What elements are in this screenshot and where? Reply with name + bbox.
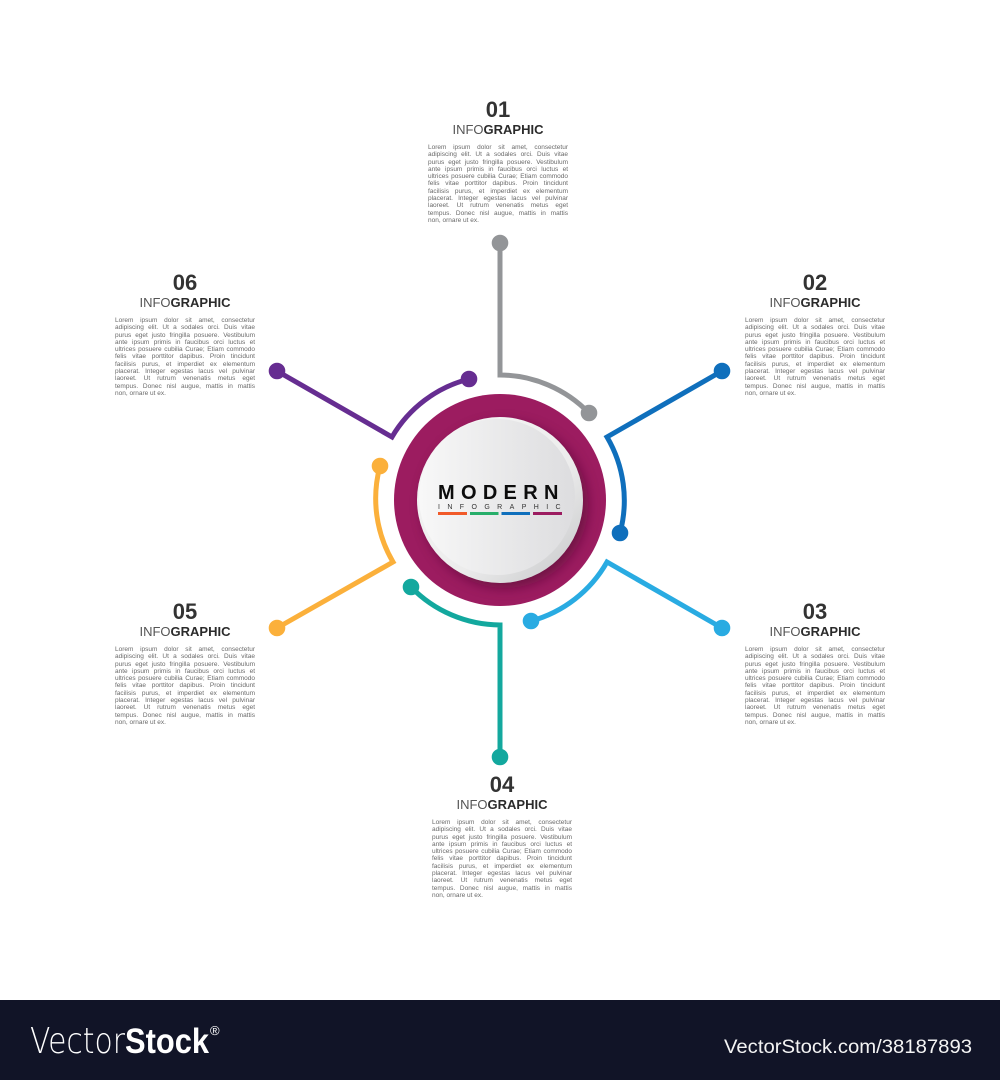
panel 06	[115, 270, 255, 397]
footer logo: ®	[210, 1023, 220, 1038]
body text 03: purus eget justo fringilla posuere. Vestibulum	[745, 661, 885, 668]
body text 03: laoreet. Ut rutrum venenatis metus eget	[745, 704, 885, 711]
body text 03: placerat. Integer egestas lacus vel pulvinar	[745, 697, 885, 704]
footer bar	[0, 1000, 1000, 1080]
number 04: 04	[490, 772, 514, 797]
body text 01: purus eget justo fringilla posuere. Vestibulum	[428, 159, 568, 166]
body text 02	[745, 317, 885, 397]
body text 04: Lorem ipsum dolor sit amet, consectetur	[432, 819, 572, 826]
number 02: 02	[803, 270, 827, 295]
connector 02: blue	[607, 365, 728, 539]
heading 01: INFOGRAPHIC	[452, 122, 544, 137]
connector 01: gray	[494, 237, 595, 419]
body text 01: ultrices posuere cubilia Curae; Etiam commodo	[428, 173, 568, 180]
body text 05: placerat. Integer egestas lacus vel pulvinar	[115, 697, 255, 704]
body text 04: placerat. Integer egestas lacus vel pulvinar	[432, 870, 572, 877]
connector 06: purple	[271, 365, 475, 437]
heading 02: INFOGRAPHIC	[769, 295, 860, 310]
connector 03: light blue	[525, 562, 728, 634]
body text 06: adipiscing elit. Ut a sodales orci. Duis vitae	[115, 324, 255, 331]
number 06: 06	[173, 270, 197, 295]
body text 04: facilisis purus, et imperdiet ex elementum	[432, 863, 572, 870]
central badge	[394, 394, 606, 606]
number 01: 01	[486, 97, 510, 122]
body text 02: laoreet. Ut rutrum venenatis metus eget	[745, 375, 885, 382]
panel 03	[745, 599, 885, 726]
connector 05: orange	[271, 460, 393, 634]
body text 01: adipiscing elit. Ut a sodales orci. Duis vitae	[428, 151, 568, 158]
body text 06: tempus. Donec nisl augue, mattis in mattis	[115, 383, 255, 390]
footer logo: Stock	[125, 1022, 209, 1061]
body text 02: ultrices posuere cubilia Curae; Etiam commodo	[745, 346, 885, 353]
body text 05: purus eget justo fringilla posuere. Vestibulum	[115, 661, 255, 668]
body text 05	[115, 646, 255, 726]
panel 04	[432, 772, 572, 899]
body text 05: non, ornare ut ex.	[115, 719, 166, 726]
heading 06: INFOGRAPHIC	[139, 295, 230, 310]
body text 01: tempus. Donec nisl augue, mattis in mattis	[428, 210, 568, 217]
body text 05: ante ipsum primis in faucibus orci luctus et	[115, 668, 255, 675]
body text 05: ultrices posuere cubilia Curae; Etiam commodo	[115, 675, 255, 682]
body text 01	[428, 144, 568, 224]
body text 06: felis vitae porttitor dapibus. Proin tincidunt	[115, 353, 255, 360]
body text 01: Lorem ipsum dolor sit amet, consectetur	[428, 144, 568, 151]
body text 05: facilisis purus, et imperdiet ex elementum	[115, 690, 255, 697]
body text 04: laoreet. Ut rutrum venenatis metus eget	[432, 877, 572, 884]
body text 01: placerat. Integer egestas lacus vel pulvinar	[428, 195, 568, 202]
number 03: 03	[803, 599, 827, 624]
body text 04: purus eget justo fringilla posuere. Vestibulum	[432, 834, 572, 841]
body text 04: tempus. Donec nisl augue, mattis in mattis	[432, 885, 572, 892]
footer logo	[30, 1021, 220, 1062]
body text 02: ante ipsum primis in faucibus orci luctus et	[745, 339, 885, 346]
panel 01	[428, 97, 568, 224]
body text 01: facilisis purus, et imperdiet ex elementum	[428, 188, 568, 195]
body text 05: laoreet. Ut rutrum venenatis metus eget	[115, 704, 255, 711]
body text 06	[115, 317, 255, 397]
body text 03: ante ipsum primis in faucibus orci luctus et	[745, 668, 885, 675]
body text 05: tempus. Donec nisl augue, mattis in mattis	[115, 712, 255, 719]
body text 06: ante ipsum primis in faucibus orci luctus et	[115, 339, 255, 346]
body text 06: non, ornare ut ex.	[115, 390, 166, 397]
panel 05	[115, 599, 255, 726]
body text 03: ultrices posuere cubilia Curae; Etiam commodo	[745, 675, 885, 682]
body text 02: adipiscing elit. Ut a sodales orci. Duis vitae	[745, 324, 885, 331]
body text 03: felis vitae porttitor dapibus. Proin tincidunt	[745, 682, 885, 689]
heading 03: INFOGRAPHIC	[769, 624, 860, 639]
body text 04: ultrices posuere cubilia Curae; Etiam commodo	[432, 848, 572, 855]
body text 04: non, ornare ut ex.	[432, 892, 483, 899]
body text 01: ante ipsum primis in faucibus orci luctus et	[428, 166, 568, 173]
number 05: 05	[173, 599, 197, 624]
body text 01: laoreet. Ut rutrum venenatis metus eget	[428, 202, 568, 209]
body text 03: tempus. Donec nisl augue, mattis in mattis	[745, 712, 885, 719]
body text 04: ante ipsum primis in faucibus orci luctus et	[432, 841, 572, 848]
body text 03: facilisis purus, et imperdiet ex elementum	[745, 690, 885, 697]
body text 04: felis vitae porttitor dapibus. Proin tincidunt	[432, 855, 572, 862]
magenta ring	[394, 394, 606, 606]
panel 02	[745, 270, 885, 397]
body text 04: adipiscing elit. Ut a sodales orci. Duis vitae	[432, 826, 572, 833]
body text 06: placerat. Integer egestas lacus vel pulvinar	[115, 368, 255, 375]
body text 06: ultrices posuere cubilia Curae; Etiam commodo	[115, 346, 255, 353]
disc face	[419, 419, 575, 575]
body text 04	[432, 819, 572, 899]
body text 02: Lorem ipsum dolor sit amet, consectetur	[745, 317, 885, 324]
footer logo: Vector	[30, 1021, 125, 1062]
body text 03: non, ornare ut ex.	[745, 719, 796, 726]
body text 03: adipiscing elit. Ut a sodales orci. Duis vitae	[745, 653, 885, 660]
body text 01: felis vitae porttitor dapibus. Proin tincidunt	[428, 180, 568, 187]
heading 05: INFOGRAPHIC	[139, 624, 230, 639]
body text 02: tempus. Donec nisl augue, mattis in mattis	[745, 383, 885, 390]
body text 02: purus eget justo fringilla posuere. Vestibulum	[745, 332, 885, 339]
body text 01: non, ornare ut ex.	[428, 217, 479, 224]
body text 06: purus eget justo fringilla posuere. Vestibulum	[115, 332, 255, 339]
body text 02: facilisis purus, et imperdiet ex elementum	[745, 361, 885, 368]
body text 02: non, ornare ut ex.	[745, 390, 796, 397]
body text 05: Lorem ipsum dolor sit amet, consectetur	[115, 646, 255, 653]
body text 03	[745, 646, 885, 726]
body text 06: Lorem ipsum dolor sit amet, consectetur	[115, 317, 255, 324]
disc rim	[417, 417, 583, 583]
footer url: VectorStock.com/38187893	[724, 1037, 972, 1058]
body text 05: adipiscing elit. Ut a sodales orci. Duis vitae	[115, 653, 255, 660]
disc shadow	[422, 422, 588, 588]
body text 05: felis vitae porttitor dapibus. Proin tincidunt	[115, 682, 255, 689]
colour bars	[438, 512, 562, 515]
body text 02: felis vitae porttitor dapibus. Proin tincidunt	[745, 353, 885, 360]
logo word: INFOGRAPHIC: INFOGRAPHIC	[438, 504, 568, 511]
body text 06: laoreet. Ut rutrum venenatis metus eget	[115, 375, 255, 382]
logo word: MODERN: MODERN	[438, 482, 565, 504]
body text 06: facilisis purus, et imperdiet ex elementum	[115, 361, 255, 368]
body text 02: placerat. Integer egestas lacus vel pulvinar	[745, 368, 885, 375]
heading 04: INFOGRAPHIC	[456, 797, 548, 812]
connector 04: teal	[405, 581, 506, 763]
body text 03: Lorem ipsum dolor sit amet, consectetur	[745, 646, 885, 653]
